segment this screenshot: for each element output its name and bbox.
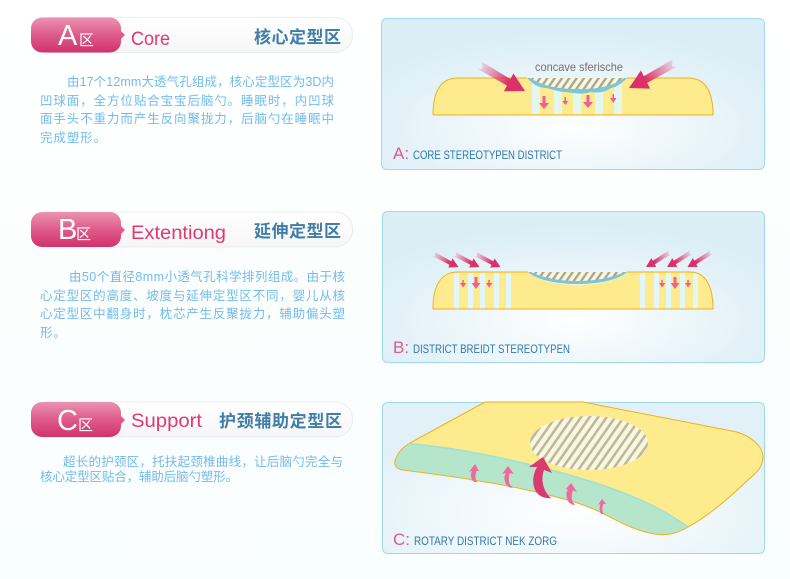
label: concave sferische: concave sferische (535, 60, 623, 74)
caption B: B: (393, 338, 409, 357)
section A description: 由17个12mm大透气孔组成，核心定型区为3D内 (67, 74, 334, 89)
caption C: ROTARY DISTRICT NEK ZORG (414, 534, 557, 548)
section B description: 心定型区的高度、坡度与延伸定型区不同，婴儿从核 (40, 288, 345, 303)
curved arrow large (529, 457, 552, 498)
small pink arrows B (460, 277, 691, 289)
tag: C zone: 区 (78, 417, 93, 434)
caption C: C: (393, 530, 410, 549)
english label: Extentiong: Extentiong (131, 223, 226, 244)
section C description: 超长的护颈区，托扶起颈椎曲线，让后脑勺完全与 (63, 454, 343, 469)
concave hatch and blue band (527, 78, 627, 94)
chinese heading: extension zone: 延伸定型区 (254, 221, 341, 241)
tag: B zone: B (58, 214, 77, 246)
caption A: A: (393, 144, 409, 163)
tag: A zone: 区 (79, 32, 94, 49)
top arrows right (644, 249, 714, 271)
chinese heading: core zone: 核心定型区 (254, 27, 341, 47)
caption A: CORE STEREOTYPEN DISTRICT (413, 148, 563, 162)
pillow cross-section B (433, 272, 713, 309)
section C header pill (31, 402, 352, 437)
section B header pill (31, 212, 352, 247)
panel: B extension diagram (382, 212, 764, 362)
caption A (393, 144, 563, 163)
section B description: 由50个直径8mm小透气孔科学排列组成。由于核 (69, 269, 345, 284)
curved arrows small (469, 464, 606, 514)
small pink arrows A (539, 94, 616, 109)
top arrows left (431, 250, 503, 271)
section A description: 完成塑形。 (40, 130, 106, 145)
tag: A zone (31, 18, 125, 52)
tag: B zone (31, 212, 125, 247)
panel: A core diagram (382, 18, 764, 170)
pillow perspective view (395, 402, 763, 535)
green neck support band (395, 443, 688, 535)
air holes (532, 84, 622, 114)
big arrow right (624, 55, 680, 97)
section A header pill (31, 18, 352, 52)
caption B: DISTRICT BREIDT STEREOTYPEN (413, 342, 570, 356)
tag: A zone: A (58, 20, 78, 52)
big arrow left (474, 58, 530, 100)
caption C (393, 530, 557, 549)
tag: C zone: C (57, 405, 78, 437)
section A description: 面手头不重力而产生反向聚拢力，后脑勺在睡眠中 (40, 111, 334, 126)
section A description (40, 74, 334, 145)
panel: C neck support diagram (382, 402, 764, 554)
caption B (393, 338, 570, 357)
tag: C zone (31, 402, 125, 437)
hatched oval (530, 416, 648, 470)
section B description: 心定型区中翻身时，枕芯产生反聚拢力，辅助偏头塑 (40, 306, 345, 321)
tag: B zone: 区 (76, 226, 91, 243)
english label: Support: Support (131, 411, 203, 432)
english label: Core: Core (131, 29, 170, 50)
concave hatch and blue band (528, 272, 627, 284)
pillow cross-section A (433, 78, 713, 115)
section A description: 凹球面，全方位贴合宝宝后脑勺。睡眠时，内凹球 (40, 93, 334, 108)
section C description: 核心定型区贴合，辅助后脑勺塑形。 (40, 469, 238, 484)
section C description (40, 454, 343, 484)
chinese heading: neck support zone: 护颈辅助定型区 (219, 411, 342, 431)
air holes (454, 273, 698, 309)
section B description (40, 269, 345, 340)
section B description: 形。 (40, 326, 66, 340)
